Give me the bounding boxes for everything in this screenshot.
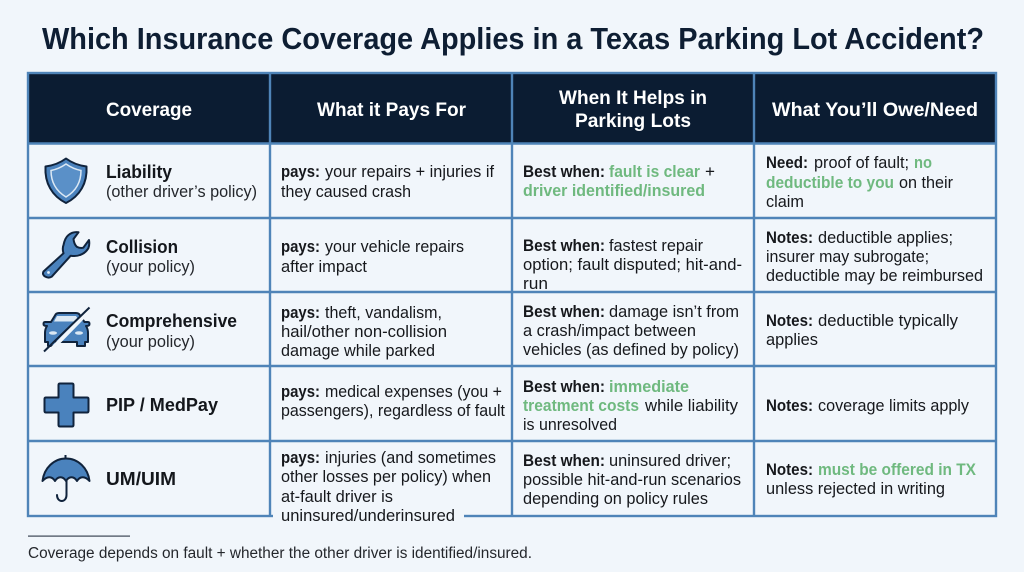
row: Collision: Best when: bbox=[523, 237, 605, 255]
row: Liability: they caused crash bbox=[281, 183, 411, 201]
row: Collision: fastest repair bbox=[609, 237, 703, 255]
icon: wrench bbox=[43, 232, 89, 277]
icon: medical cross bbox=[44, 384, 88, 426]
row: PIP / MedPay: pays: bbox=[281, 383, 320, 401]
row: Comprehensive bbox=[44, 303, 959, 360]
row: PIP / MedPay: Notes: bbox=[766, 397, 813, 415]
row: Collision: Notes: bbox=[766, 229, 813, 247]
row: Collision: run bbox=[523, 275, 548, 293]
row: PIP / MedPay: coverage limits apply bbox=[818, 397, 970, 415]
row: PIP / MedPay: Best when: bbox=[523, 378, 605, 396]
row: Liability: no bbox=[914, 154, 932, 172]
row: Collision: deductible applies; bbox=[818, 229, 953, 247]
row: PIP / MedPay bbox=[44, 378, 970, 434]
row: Liability: on their bbox=[899, 174, 953, 192]
row: Comprehensive: damage while parked bbox=[281, 342, 435, 360]
table header: Parking Lots bbox=[575, 110, 691, 132]
table header bbox=[27, 72, 997, 144]
row: Liability: (other driver’s policy) bbox=[106, 183, 257, 201]
row: UM/UIM: uninsured driver; bbox=[609, 452, 731, 470]
row: UM/UIM: injuries (and sometimes bbox=[325, 449, 496, 467]
row: Liability: deductible to you bbox=[766, 174, 894, 192]
row: Collision: (your policy) bbox=[106, 258, 195, 276]
row: Comprehensive: Comprehensive bbox=[106, 311, 237, 331]
row: Liability: proof of fault; bbox=[814, 154, 909, 172]
table header: What You’ll Owe/Need bbox=[772, 99, 978, 121]
table header: What it Pays For bbox=[317, 99, 466, 121]
footnote rule bbox=[28, 536, 130, 537]
row: Comprehensive: applies bbox=[766, 331, 818, 349]
row: Comprehensive: hail/other non-collision bbox=[281, 323, 447, 341]
row: Collision bbox=[43, 229, 983, 293]
row: PIP / MedPay: treatment costs bbox=[523, 397, 639, 415]
footnote: Coverage depends on fault + whether the other driver is identified/insured. bbox=[28, 545, 532, 562]
row: Liability: Need: bbox=[766, 154, 808, 172]
row: Collision: Collision bbox=[106, 237, 178, 257]
row: Collision: insurer may subrogate; bbox=[766, 248, 929, 266]
row: UM/UIM: other losses per policy) when bbox=[281, 468, 491, 486]
row: Liability: Liability bbox=[106, 162, 172, 182]
title: Which Insurance Coverage Applies in a Texas Parking Lot Accident? bbox=[42, 22, 984, 56]
row: PIP / MedPay: while liability bbox=[644, 397, 739, 415]
row: UM/UIM: Best when: bbox=[523, 452, 605, 470]
row: Liability: driver identified/insured bbox=[523, 182, 705, 200]
row: Comprehensive: theft, vandalism, bbox=[325, 304, 442, 322]
row: Collision: deductible may be reimbursed bbox=[766, 267, 983, 285]
row: UM/UIM: pays: bbox=[281, 449, 320, 467]
table grid bbox=[28, 73, 996, 516]
row: UM/UIM: Notes: bbox=[766, 461, 813, 479]
row: PIP / MedPay: is unresolved bbox=[523, 416, 617, 434]
row: Liability: fault is clear bbox=[609, 163, 701, 181]
row: Liability bbox=[45, 154, 953, 211]
row: PIP / MedPay: immediate bbox=[609, 378, 689, 396]
icon: car with slash bbox=[44, 308, 90, 353]
row: Comprehensive: Best when: bbox=[523, 303, 605, 321]
row: Liability: + bbox=[705, 163, 715, 181]
row: Collision: after impact bbox=[281, 258, 367, 276]
row: PIP / MedPay: PIP / MedPay bbox=[106, 395, 218, 415]
row: UM/UIM bbox=[42, 449, 976, 525]
row: PIP / MedPay: passengers), regardless of fault bbox=[281, 402, 505, 420]
row: UM/UIM: UM/UIM bbox=[106, 469, 176, 489]
row: Liability: pays: bbox=[281, 163, 320, 181]
row: Liability: claim bbox=[766, 193, 804, 211]
row: UM/UIM: must be offered in TX bbox=[818, 461, 976, 479]
row: Comprehensive: (your policy) bbox=[106, 333, 195, 351]
row: Comprehensive: Notes: bbox=[766, 312, 813, 330]
row: UM/UIM: possible hit-and-run scenarios bbox=[523, 471, 741, 489]
row: Comprehensive: deductible typically bbox=[818, 312, 959, 330]
row: Comprehensive: damage isn’t from bbox=[609, 303, 739, 321]
row: Liability: Best when: bbox=[523, 163, 605, 181]
table header: When It Helps in bbox=[559, 87, 707, 109]
border gap behind UM/UIM text bbox=[273, 513, 464, 519]
row: Collision: option; fault disputed; hit-and- bbox=[523, 256, 742, 274]
row: Liability: your repairs + injuries if bbox=[325, 163, 494, 181]
row: UM/UIM: at-fault driver is bbox=[281, 488, 393, 506]
row: Collision: pays: bbox=[281, 238, 320, 256]
row: UM/UIM: unless rejected in writing bbox=[766, 480, 945, 498]
table header: Coverage bbox=[106, 99, 192, 121]
row: Comprehensive: vehicles (as defined by policy) bbox=[523, 341, 739, 359]
row: UM/UIM: uninsured/underinsured bbox=[281, 507, 455, 525]
row: Collision: your vehicle repairs bbox=[325, 238, 464, 256]
row: Comprehensive: pays: bbox=[281, 304, 320, 322]
row: UM/UIM: depending on policy rules bbox=[523, 490, 708, 508]
icon: umbrella bbox=[42, 455, 90, 501]
row: Comprehensive: a crash/impact between bbox=[523, 322, 696, 340]
row: PIP / MedPay: medical expenses (you + bbox=[325, 383, 502, 401]
icon: shield bbox=[45, 158, 87, 203]
